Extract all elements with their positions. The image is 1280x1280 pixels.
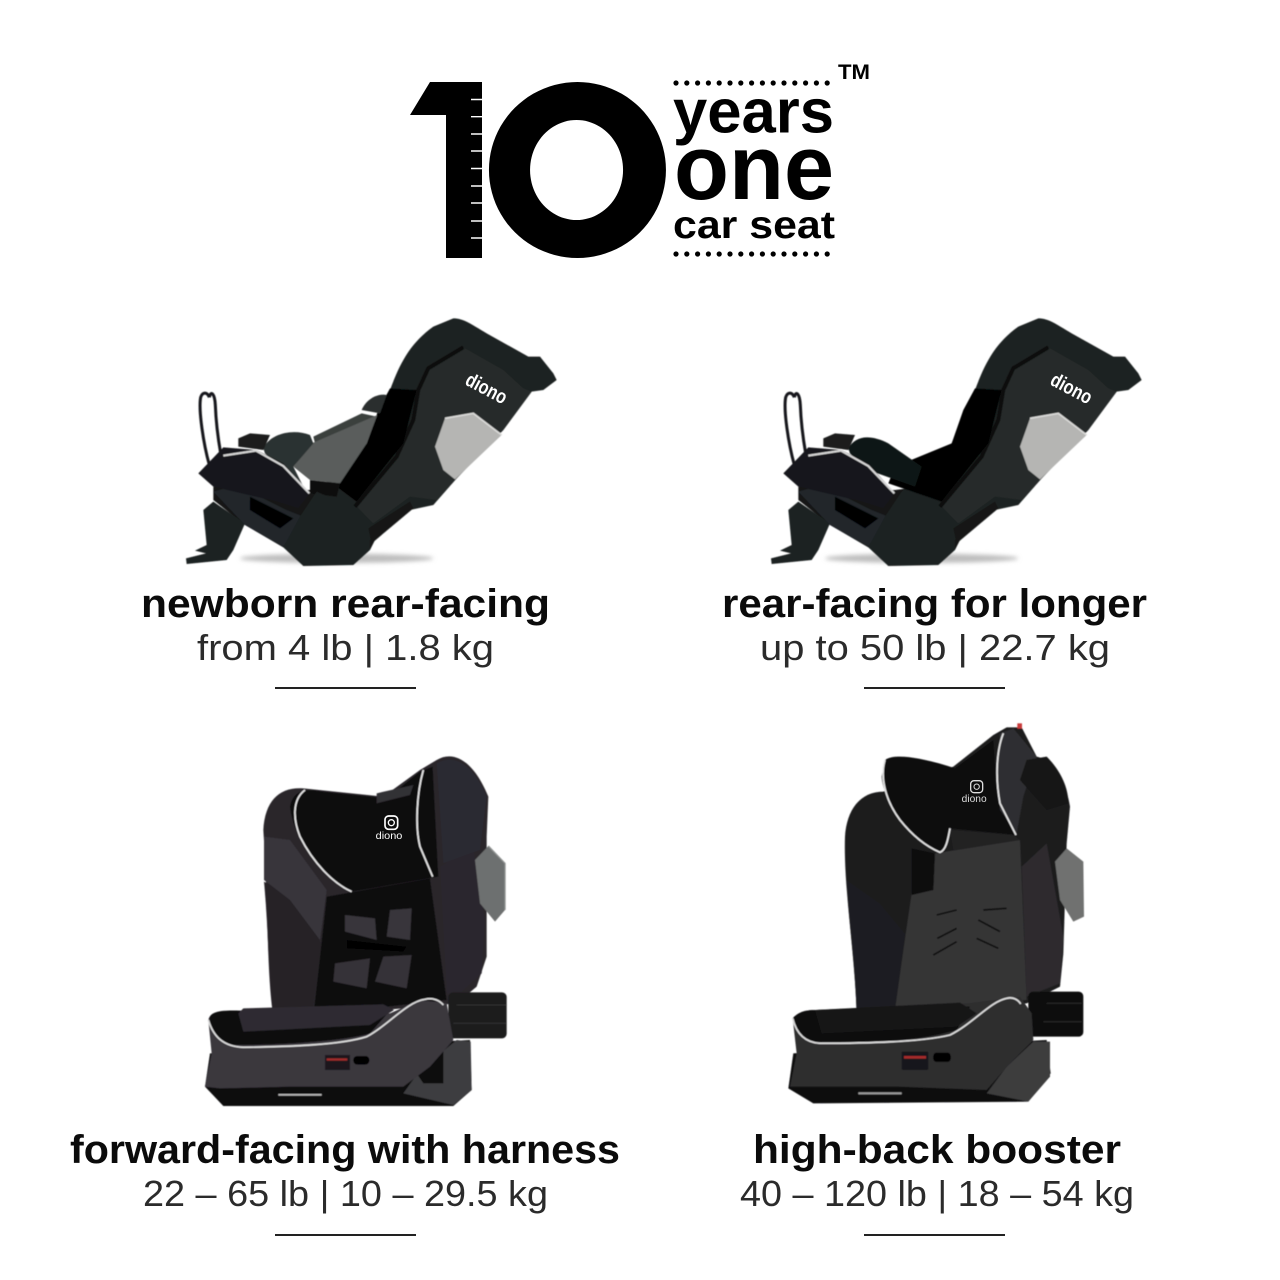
illustration: high-back booster seat (788, 723, 1084, 1103)
weight range: up to 50 lb | 22.7 kg: up to 50 lb | 22.7 kg (760, 627, 1110, 668)
illustration: forward-facing seat with harness: diono (376, 831, 403, 842)
illustration: reclined car seat with newborn insert (186, 318, 557, 566)
logo numeral 0 (489, 82, 666, 258)
rule under forward-facing label (275, 1234, 416, 1236)
heading: rear-facing for longer: rear-facing for longer (722, 582, 1147, 626)
heading: high-back booster: high-back booster (753, 1128, 1121, 1172)
logo numeral 1 with height ruler (410, 82, 482, 258)
panel: rear-facing for longer (722, 318, 1147, 689)
rule under booster label (864, 1234, 1005, 1236)
logo top dotted line (673, 80, 830, 86)
rule under newborn label (275, 687, 416, 689)
panel: newborn rear-facing (141, 318, 557, 689)
logo words: car seat: car seat (673, 204, 835, 247)
logo bottom dotted line (673, 251, 830, 257)
illustration: high-back booster seat: diono (962, 794, 987, 805)
heading: newborn rear-facing: newborn rear-facing (141, 582, 550, 626)
logo word: one: one (674, 117, 834, 219)
logo: 10 years one car seat (410, 61, 870, 258)
panel: high-back booster (740, 723, 1134, 1236)
logo word: years: years (673, 78, 834, 146)
weight range: from 4 lb | 1.8 kg: from 4 lb | 1.8 kg (197, 627, 494, 668)
rule under rear-facing label (864, 687, 1005, 689)
trademark: TM (838, 61, 870, 84)
illustration: reclined car seat without insert: diono (1047, 369, 1096, 409)
heading: forward-facing with harness: forward-facing with harness (70, 1128, 620, 1172)
weight range: 22 – 65 lb | 10 – 29.5 kg: 22 – 65 lb | 10 – 29.5 kg (143, 1173, 548, 1214)
illustration: reclined car seat with newborn insert: diono (462, 369, 511, 409)
panel: forward-facing with harness (70, 756, 620, 1236)
illustration: reclined car seat without insert (771, 318, 1142, 566)
illustration: forward-facing seat with harness (205, 756, 507, 1106)
weight range: 40 – 120 lb | 18 – 54 kg: 40 – 120 lb | 18 – 54 kg (740, 1173, 1134, 1214)
